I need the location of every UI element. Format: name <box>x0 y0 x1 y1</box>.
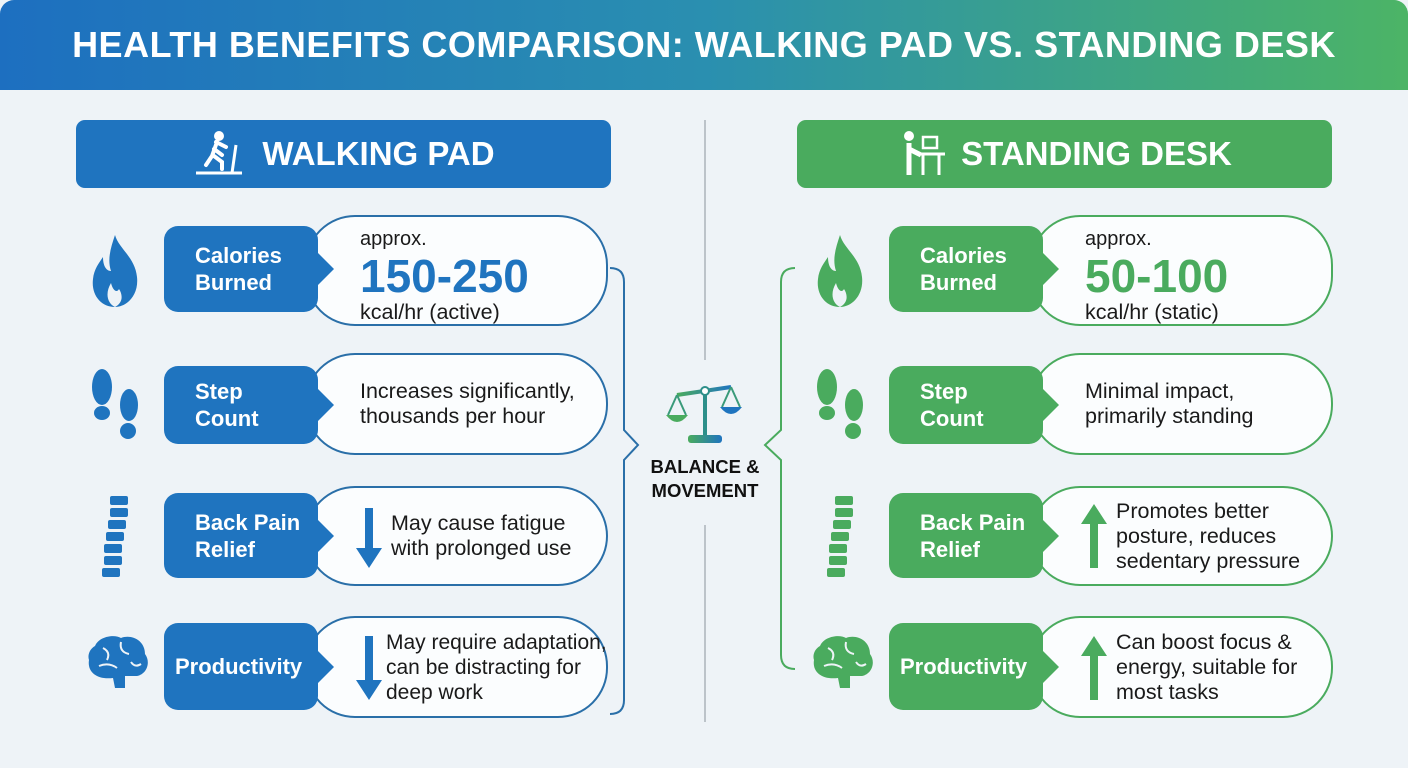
row: walking calories: 150-250 <box>360 250 529 302</box>
row: standing steps: primarily standing <box>1085 404 1253 428</box>
center: balance icon and label: MOVEMENT <box>652 480 758 501</box>
row: walking back pain <box>102 486 608 586</box>
row: walking back pain: Back Pain <box>195 510 300 534</box>
row: walking back pain: May cause fatigue <box>391 511 566 535</box>
row: standing calories: kcal/hr (static) <box>1085 300 1219 324</box>
icon: footprints <box>92 369 138 439</box>
header: walking pad <box>76 120 611 188</box>
icon: brain <box>88 636 148 688</box>
bracket: left <box>610 267 640 715</box>
row: walking steps <box>92 353 608 455</box>
row: walking steps: Increases significantly, <box>360 379 575 403</box>
header: walking pad: WALKING PAD <box>262 135 495 172</box>
row: standing calories <box>818 215 1333 326</box>
title <box>0 0 1408 90</box>
row: walking productivity: Productivity <box>175 654 302 679</box>
center divider <box>704 120 706 360</box>
row: standing back pain: Promotes better <box>1116 498 1269 522</box>
row: standing calories: 50-100 <box>1085 250 1228 302</box>
icon: scale <box>666 385 742 443</box>
row: standing back pain: sedentary pressure <box>1116 548 1300 572</box>
row: standing productivity: Productivity <box>900 654 1027 679</box>
row: walking back pain: Relief <box>195 536 255 562</box>
row: walking calories <box>92 215 608 326</box>
row: walking steps: thousands per hour <box>360 404 545 428</box>
row: standing back pain: Back Pain <box>920 510 1025 534</box>
row: standing calories: Burned <box>920 270 997 295</box>
arrow: up <box>1081 504 1107 568</box>
row: walking calories: Calories <box>195 243 282 268</box>
title: HEALTH BENEFITS COMPARISON: WALKING PAD VS. STANDING DESK <box>72 24 1336 65</box>
row: standing calories: approx. <box>1085 228 1152 250</box>
row: walking calories: approx. <box>360 228 427 250</box>
row: walking steps: Count <box>195 406 259 431</box>
header: standing desk: STANDING DESK <box>961 135 1232 172</box>
header: standing desk <box>797 120 1332 188</box>
row: standing steps: Count <box>920 406 984 431</box>
center: balance icon and label <box>651 385 759 501</box>
row: walking steps: Step <box>195 379 243 404</box>
row: standing steps: Step <box>920 379 968 404</box>
row: walking productivity: May require adaptation, <box>386 630 607 654</box>
row: walking calories: Burned <box>195 270 272 295</box>
row: standing steps: Minimal impact, <box>1085 379 1234 403</box>
row: standing steps <box>817 353 1333 455</box>
row: standing calories: Calories <box>920 243 1007 268</box>
row: walking productivity: deep work <box>386 680 483 704</box>
row: walking calories: kcal/hr (active) <box>360 300 500 324</box>
row: standing back pain <box>827 486 1333 586</box>
center: balance icon and label: BALANCE & <box>651 456 759 477</box>
row: standing productivity: most tasks <box>1116 680 1219 704</box>
arrow: down <box>356 508 382 568</box>
row: walking productivity <box>88 616 608 718</box>
row: standing back pain: Relief <box>920 536 980 562</box>
row: standing productivity: Can boost focus & <box>1116 630 1292 654</box>
bracket: right <box>764 267 795 670</box>
icon: spine <box>102 496 128 577</box>
row: standing productivity: energy, suitable for <box>1116 654 1297 678</box>
row: standing productivity <box>813 616 1333 718</box>
icon: flame <box>92 235 138 307</box>
row: walking back pain: with prolonged use <box>391 536 571 560</box>
row: walking productivity: can be distracting for <box>386 656 581 678</box>
row: standing back pain: posture, reduces <box>1116 524 1276 548</box>
